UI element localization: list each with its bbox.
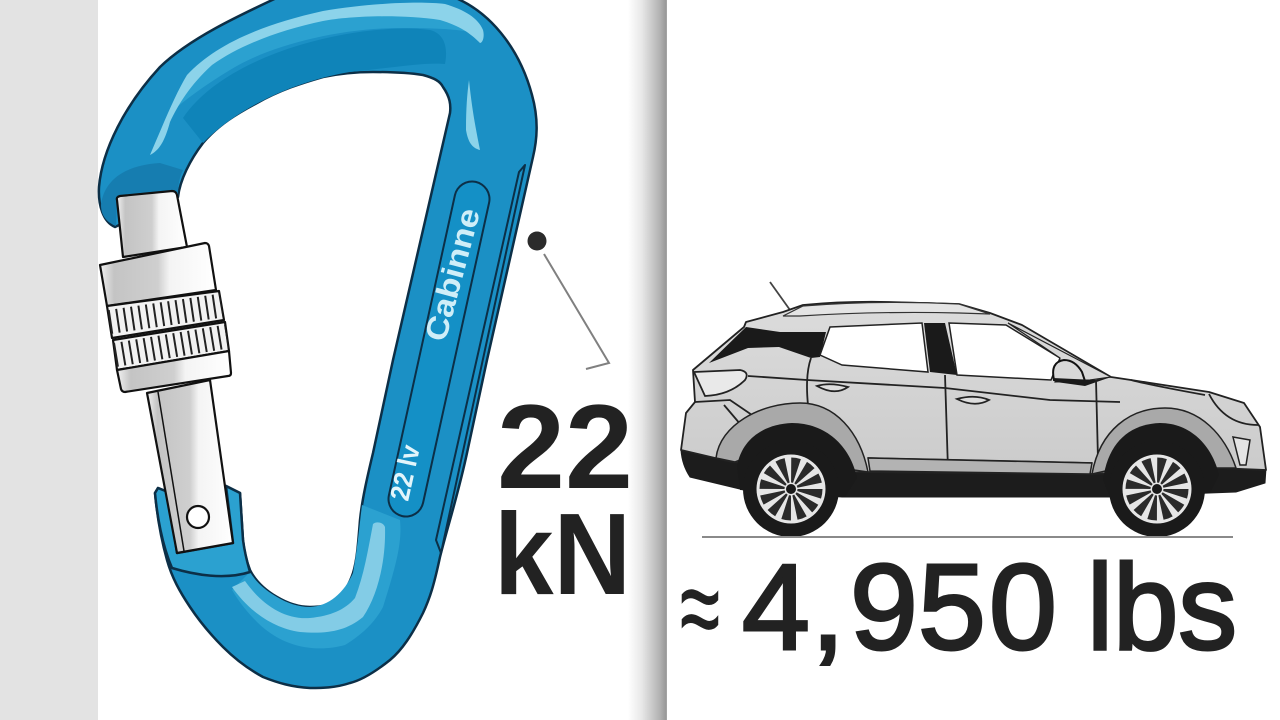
weight figure: 4,950: [742, 539, 1057, 675]
collar: [100, 243, 216, 306]
gate pin hole: [187, 506, 209, 528]
callout line: [544, 254, 609, 369]
carabiner body: [99, 0, 537, 688]
spine label pill: [406, 199, 472, 499]
rear wheel: [743, 441, 839, 537]
rear side window: [820, 323, 928, 372]
label: Cabinne: Cabinne: [418, 204, 487, 345]
unit kN: kN: [494, 489, 631, 619]
bottom highlight: [232, 522, 385, 633]
tail light: [694, 370, 747, 396]
rear wheel arch trim: [716, 403, 868, 472]
sill trim: [868, 458, 1092, 474]
value: approx 4,950 lbs: [680, 539, 1237, 675]
knurl ring 2: [113, 322, 229, 370]
number 22: 22: [497, 380, 633, 514]
value: 22 kN: [494, 380, 633, 619]
label: 22 lv: 22 lv: [385, 442, 426, 503]
front wheel arch trim: [1092, 408, 1236, 474]
front grille vent: [1233, 437, 1250, 465]
approx sign: ≈: [680, 541, 720, 675]
door handles: [817, 384, 848, 391]
bottom lighter band: [232, 505, 400, 648]
lower collar: [117, 351, 231, 392]
front wheel: [1109, 441, 1205, 537]
callout dot: [528, 232, 546, 250]
windshield pillar: [1008, 323, 1111, 382]
front wheel arch opening: [1103, 423, 1219, 497]
ground line: [702, 536, 1233, 538]
roof rail: [783, 302, 990, 316]
antenna: [770, 282, 790, 310]
icon: blue carabiner: [99, 0, 537, 688]
car body: [681, 302, 1266, 474]
side mirror: [1053, 360, 1085, 381]
front side window: [949, 323, 1060, 380]
callout leader: [528, 232, 609, 369]
weight unit: lbs: [1087, 539, 1237, 675]
screw gate: [100, 191, 233, 553]
rear black pillar: [709, 327, 826, 363]
door pillar: [924, 323, 957, 375]
top lighter band: [170, 5, 478, 113]
lower hook: [155, 486, 250, 576]
top highlight: [150, 3, 484, 155]
knurl ring 1: [107, 291, 224, 338]
black lower body: [681, 450, 1266, 497]
top inner dark band: [183, 29, 446, 143]
left grey margin: [0, 0, 98, 720]
center divider shadow: [628, 0, 667, 720]
rear wheel arch opening: [737, 423, 857, 497]
gate pin: [147, 380, 233, 553]
icon: SUV side view: [681, 282, 1266, 538]
nose shadow: [101, 163, 183, 226]
right side highlight: [466, 80, 480, 150]
body character lines: [695, 358, 1258, 470]
side channel: [436, 165, 525, 553]
gate upper sleeve: [117, 191, 187, 257]
